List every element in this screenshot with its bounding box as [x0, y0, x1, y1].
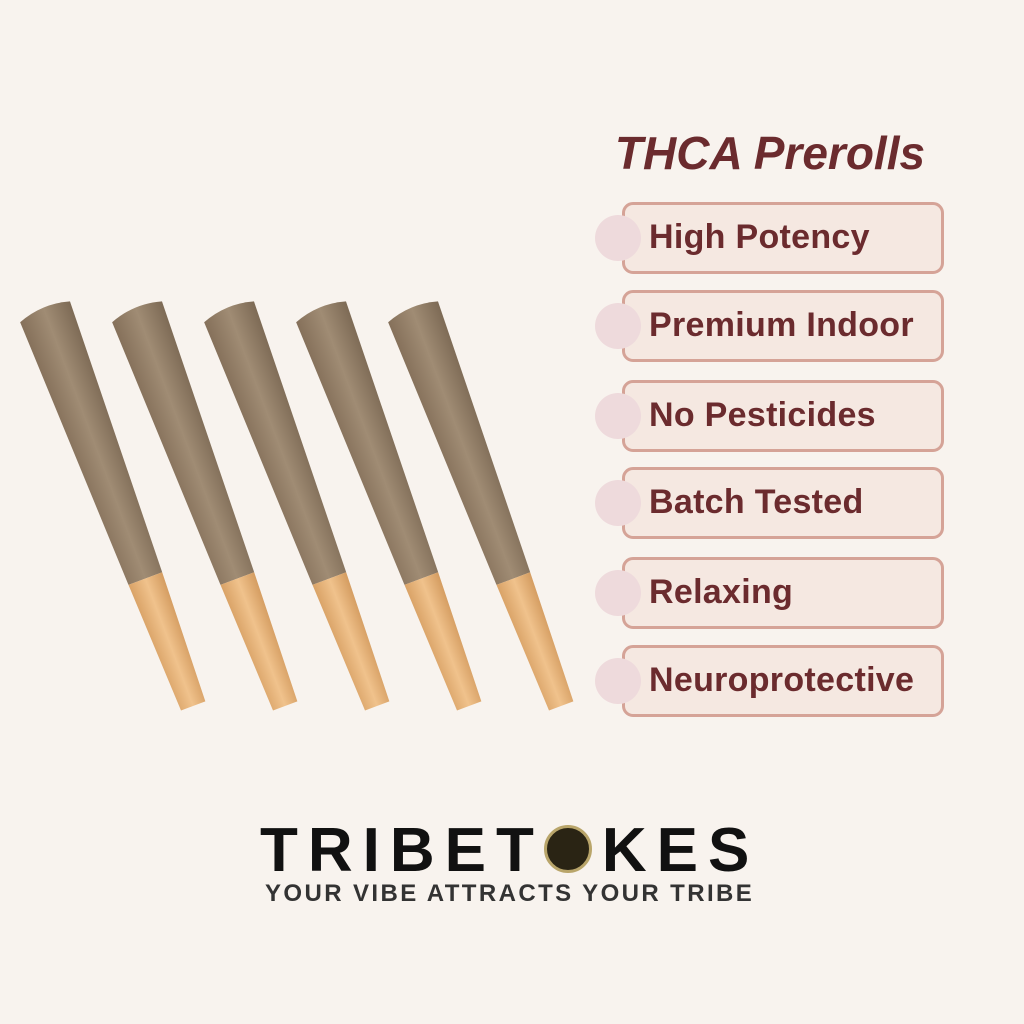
card: High Potency	[622, 202, 944, 274]
logo wordmark: TRIBET KES	[260, 816, 759, 885]
card: Premium Indoor: Premium Indoor	[649, 306, 914, 344]
tagline: YOUR VIBE ATTRACTS YOUR TRIBE	[265, 880, 754, 907]
preroll 5	[386, 298, 586, 715]
preroll 3	[202, 298, 402, 715]
card: Neuroprotective: Neuroprotective	[649, 661, 914, 699]
prerolls illustration	[20, 301, 574, 710]
card: Neuroprotective	[622, 645, 944, 717]
preroll 4	[294, 298, 494, 715]
card: Relaxing: Relaxing	[649, 573, 793, 611]
card: Batch Tested: Batch Tested	[649, 483, 864, 521]
preroll 1	[18, 298, 218, 715]
card: Batch Tested	[622, 467, 944, 539]
preroll 2	[110, 298, 310, 715]
card: High Potency: High Potency	[649, 218, 870, 256]
card: No Pesticides: No Pesticides	[649, 396, 876, 434]
card: Relaxing	[622, 557, 944, 629]
logo	[260, 816, 759, 907]
card: No Pesticides	[622, 380, 944, 452]
title: THCA Prerolls	[615, 127, 925, 179]
card: Premium Indoor	[622, 290, 944, 362]
